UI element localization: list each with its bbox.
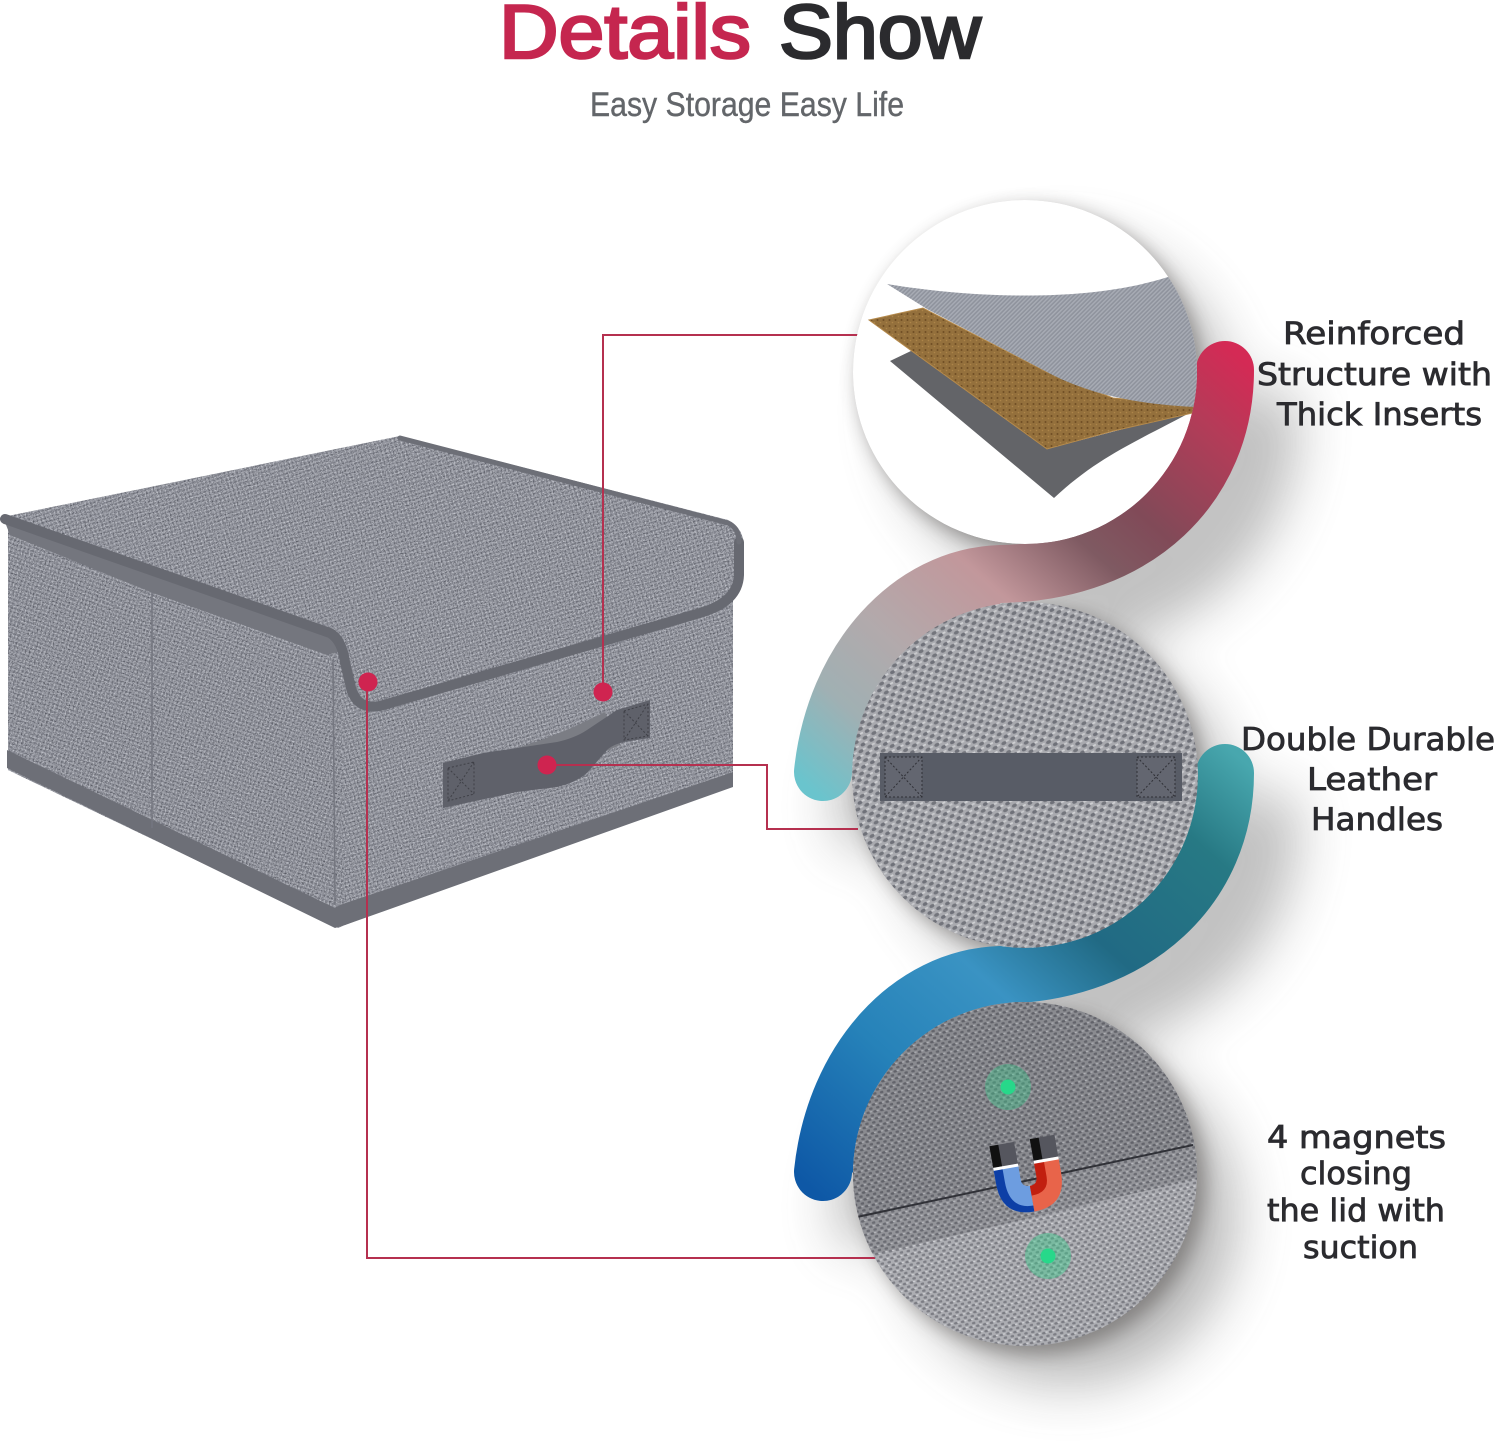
box corner and seam [152,592,335,905]
mid fold band [850,1142,1200,1260]
icon: horseshoe magnet [989,1135,1062,1212]
label: reinforced structure: Thick Inserts [1276,397,1482,433]
noise overlay for fabric [0,430,750,930]
title [499,0,982,75]
upper flap [850,1000,1200,1218]
top fabric layer [887,277,1200,407]
seam line [857,1145,1193,1217]
lid side flap band [3,517,345,655]
box left face [8,520,345,928]
subtitle: Easy Storage Easy Life [590,86,904,124]
ribbon: teal to blue [823,773,1225,1172]
label: reinforced structure: Structure with [1257,357,1492,393]
strap [880,753,1182,801]
label: leather handles [1241,722,1495,838]
handle [443,700,650,808]
label: leather handles: Leather [1307,762,1437,798]
soft shadows behind ribbons and circles [858,206,1267,1384]
marker dots [358,672,612,774]
label: magnets: closing [1300,1156,1412,1192]
green dot bottom [1025,1233,1071,1279]
green dot top [985,1064,1031,1110]
label: leather handles: Double Durable [1241,722,1495,758]
circle: magnets [850,1000,1200,1350]
box bottom trim [7,750,733,928]
box front face [340,590,733,925]
label: magnets: the lid with [1267,1193,1445,1229]
ribbon: red to teal [823,370,1225,772]
leader lines [367,335,875,1258]
label: magnets [1267,1120,1446,1266]
label: magnets: 4 magnets [1267,1120,1446,1156]
label: reinforced structure: Reinforced [1283,316,1465,352]
label: reinforced structure [1257,316,1492,433]
bottom dark layer [890,350,1195,498]
storage box [0,430,750,930]
circle: leather handle [852,602,1198,948]
cork layer [869,308,1197,449]
label: magnets: suction [1303,1230,1418,1266]
box lid [3,436,744,713]
circle: reinforced layers [853,200,1200,544]
lid edge trim [5,438,739,707]
label: leather handles: Handles [1311,802,1443,838]
